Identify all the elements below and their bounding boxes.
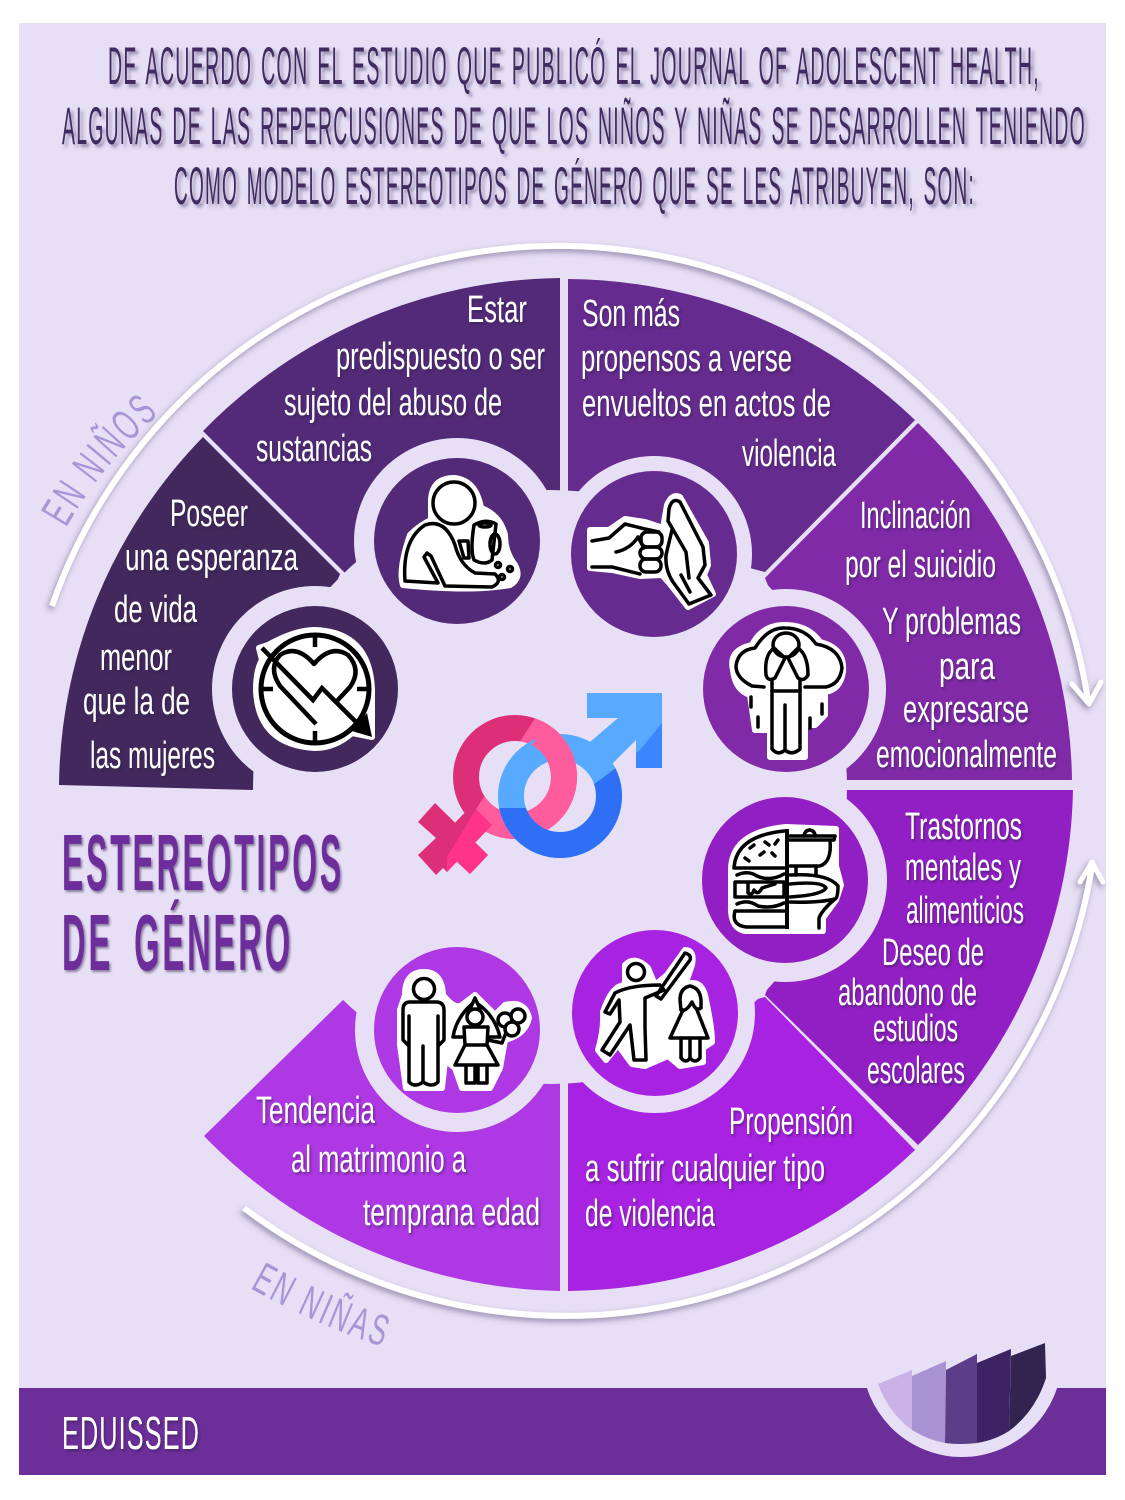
footer bar xyxy=(19,1257,1106,1475)
text: suicidio: Y problemas xyxy=(882,601,1021,643)
text: abuso de sustancias: sujeto del abuso de xyxy=(284,382,502,424)
label: en niñas: EN NIÑAS xyxy=(252,1262,389,1345)
text: trastornos: Deseo de xyxy=(882,932,984,974)
text: esperanza de vida: de vida xyxy=(114,589,198,631)
text: suicidio: Inclinación xyxy=(860,495,971,537)
text: actos de violencia: violencia xyxy=(742,433,837,475)
text: esperanza de vida: menor xyxy=(100,637,172,679)
text: esperanza de vida: una esperanza xyxy=(125,537,299,579)
text: propensión a violencia: a sufrir cualquier tipo xyxy=(585,1148,825,1190)
icon: violence against woman xyxy=(598,950,712,1066)
label: en niños: EN NIÑOS xyxy=(41,396,155,526)
icon: child marriage xyxy=(400,972,529,1088)
text: matrimonio xyxy=(256,1090,540,1234)
text: abuso de sustancias: sustancias xyxy=(256,428,372,470)
arrow: niños arc xyxy=(52,246,1101,704)
text: trastornos xyxy=(838,806,1024,1092)
text: suicidio xyxy=(845,495,1057,776)
text: propensión a violencia: Propensión xyxy=(729,1101,853,1143)
text: matrimonio: temprana edad xyxy=(363,1192,540,1234)
text: matrimonio: al matrimonio a xyxy=(291,1139,467,1181)
logo xyxy=(878,1343,1046,1444)
icon: fist and hand xyxy=(590,496,713,607)
female symbol xyxy=(418,728,564,875)
circular diagram wedges xyxy=(59,278,1073,1291)
title xyxy=(62,37,1086,216)
male symbol xyxy=(511,693,662,845)
text: suicidio: por el suicidio xyxy=(845,544,996,586)
icon: burger and toilet xyxy=(731,827,841,931)
text: abuso de sustancias: Estar xyxy=(467,289,527,331)
text: matrimonio: Tendencia xyxy=(256,1090,376,1132)
text: actos de violencia: Son más xyxy=(582,293,680,335)
text: suicidio: expresarse xyxy=(903,689,1029,731)
text: trastornos: alimenticios xyxy=(906,890,1024,932)
heading: estereotipos de género xyxy=(62,818,344,987)
text: esperanza de vida: que la de xyxy=(83,681,190,723)
text: DE GÉNERO xyxy=(62,898,293,987)
text: actos de violencia: propensos a verse xyxy=(581,338,792,380)
text: propensión a violencia: de violencia xyxy=(585,1193,716,1235)
text: propensión a violencia xyxy=(585,1101,853,1235)
text: esperanza de vida: las mujeres xyxy=(90,735,215,777)
icon: person with substances xyxy=(402,478,518,588)
text: esperanza de vida xyxy=(83,493,299,777)
text: trastornos: abandono de xyxy=(838,972,977,1014)
text: actos de violencia: envueltos en actos de xyxy=(582,383,831,425)
text: abuso de sustancias xyxy=(256,289,545,470)
text: abuso de sustancias: predispuesto o ser xyxy=(336,336,545,378)
icon: gender symbols xyxy=(418,693,662,875)
icon: crying person in cloud xyxy=(732,625,843,757)
text: trastornos: Trastornos xyxy=(905,806,1022,848)
footer brand: EDUISSED xyxy=(62,1407,200,1459)
text: trastornos: escolares xyxy=(867,1050,965,1092)
text: actos de violencia xyxy=(581,293,837,475)
arrow: niñas arc xyxy=(244,862,1103,1316)
text: ESTEREOTIPOS xyxy=(62,818,344,907)
text: esperanza de vida: Poseer xyxy=(170,493,248,535)
icon: clock heart xyxy=(256,630,372,748)
female ring overlap xyxy=(531,724,577,775)
text: trastornos: mentales y xyxy=(905,847,1021,889)
text: suicidio: para xyxy=(939,646,996,688)
text: trastornos: estudios xyxy=(873,1008,958,1050)
